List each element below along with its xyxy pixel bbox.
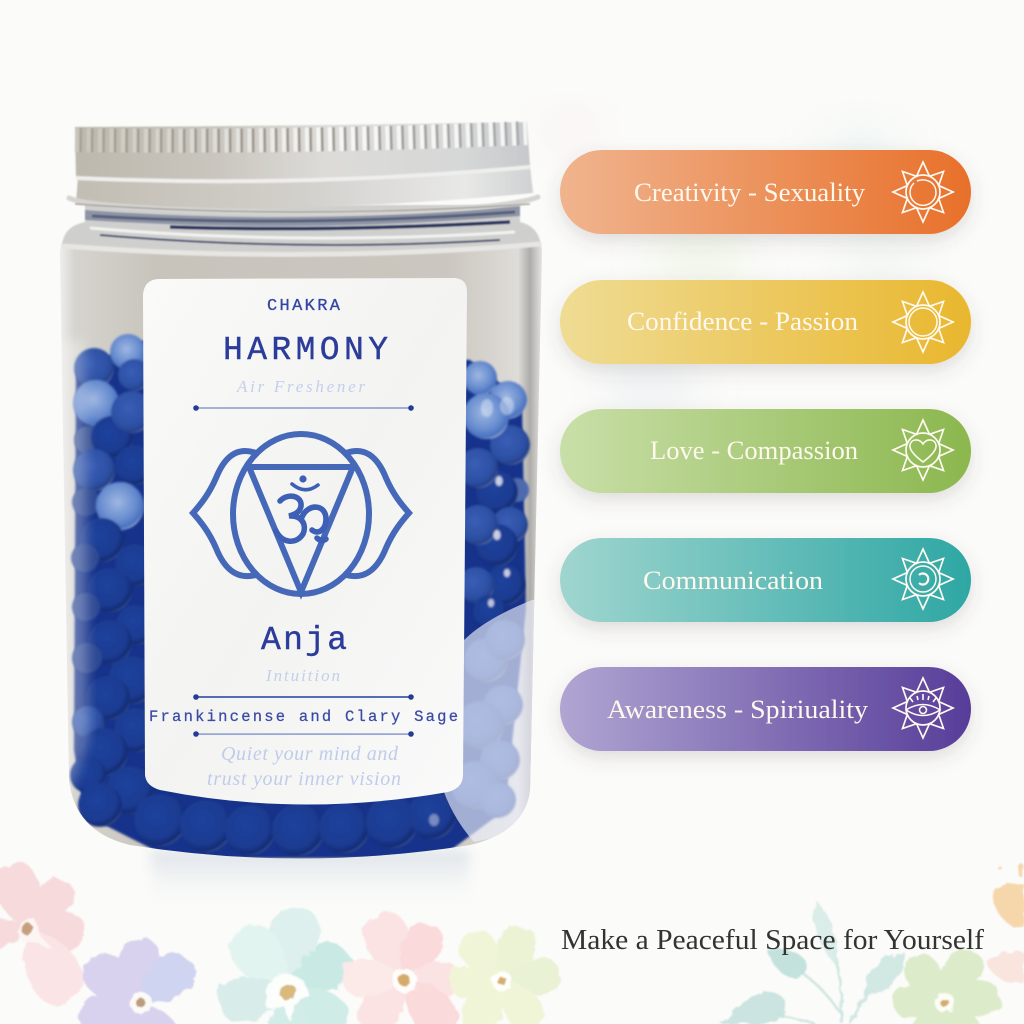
- icon: om symbol: [276, 475, 326, 541]
- air freshener: Air Freshener: [236, 377, 365, 396]
- pill: communication: Communication: [643, 565, 823, 595]
- product label: [143, 278, 467, 805]
- pill: creativity: Creativity - Sexuality: [634, 177, 866, 207]
- leaves: [720, 900, 905, 1024]
- flower: pink: [0, 858, 93, 1014]
- left edge haze: [60, 340, 88, 790]
- flower: teal: [214, 903, 361, 1024]
- jar reflection: [150, 850, 470, 905]
- pill: love: [560, 409, 971, 493]
- lid knurling: [75, 133, 527, 141]
- lid groove: [76, 167, 530, 181]
- flower: blush pink: [340, 906, 465, 1024]
- divider 2: [193, 694, 414, 700]
- tagline: Make a Peaceful Space for Yourself: [561, 924, 984, 956]
- flower: lime: [449, 919, 562, 1024]
- pill: creativity: [560, 150, 971, 234]
- blue beads: [60, 334, 545, 858]
- lid skirt: [75, 122, 530, 180]
- icon: solar plexus chakra: [893, 292, 953, 352]
- flower: purple: [73, 938, 203, 1024]
- leaf stems: [770, 950, 870, 1024]
- icon: heart chakra: [893, 420, 953, 480]
- label title small: CHAKRA: [267, 297, 341, 316]
- icon: third eye chakra: [893, 678, 953, 738]
- quote: trust your inner vision: [207, 768, 401, 790]
- lid collar: [76, 166, 533, 208]
- icon: third eye chakra: [193, 434, 409, 594]
- pale pink petals: [986, 951, 1024, 983]
- pill: communication: [560, 538, 971, 622]
- jar neck and shoulder: [62, 205, 541, 255]
- pale dots: [999, 863, 1024, 877]
- quote: Quiet your mind and: [221, 743, 399, 765]
- orange splash: [993, 883, 1024, 929]
- chakra meaning: Intuition: [265, 666, 340, 685]
- pill: confidence: [560, 280, 971, 364]
- chakra name: Anja: [261, 622, 347, 659]
- quote: [207, 743, 401, 790]
- label title: HARMONY: [223, 332, 388, 369]
- pill: confidence: Confidence - Passion: [627, 306, 858, 336]
- lid: [69, 122, 538, 213]
- pill: love: Love - Compassion: [650, 435, 858, 465]
- divider 1: [193, 405, 414, 411]
- watercolor foliage right: [720, 863, 1024, 1024]
- scent: Frankincense and Clary Sage: [149, 708, 458, 726]
- label paper: [143, 278, 467, 805]
- pill: awareness: Awareness - Spiriuality: [607, 694, 869, 724]
- divider 3: [193, 731, 414, 737]
- translucent sticker overlay: [444, 600, 534, 842]
- jar body: [60, 240, 542, 858]
- icon: throat chakra: [893, 549, 953, 609]
- icon: sacral chakra: [893, 162, 953, 222]
- lid flange: [69, 197, 538, 213]
- pill: awareness: [560, 667, 971, 751]
- jar with beads, lid and label: [60, 122, 545, 858]
- flower: green: [891, 942, 1002, 1024]
- watercolor flowers left: [0, 858, 562, 1024]
